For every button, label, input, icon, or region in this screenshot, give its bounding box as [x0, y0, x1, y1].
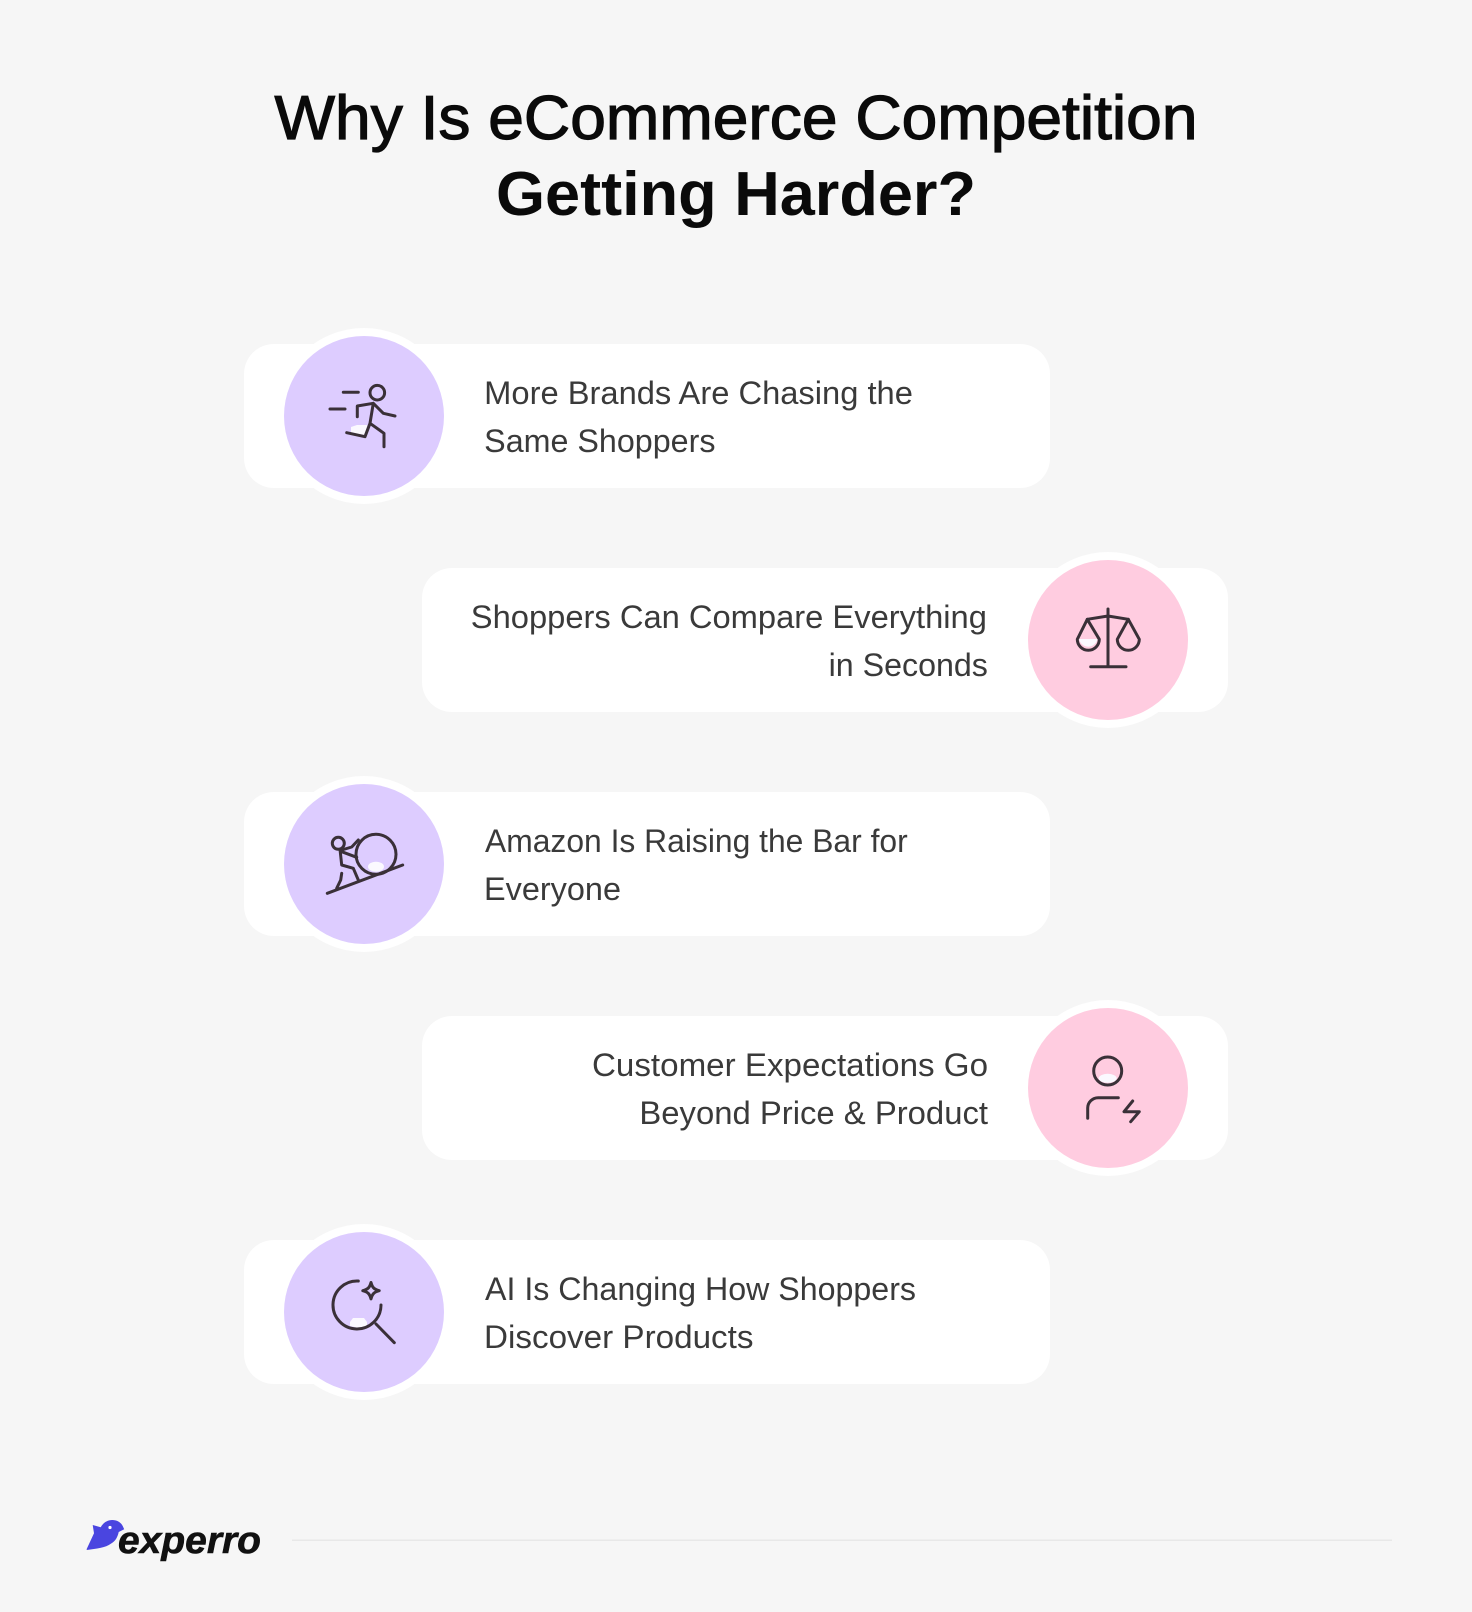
panel: more brands: Same Shoppers	[484, 423, 716, 459]
title: Getting Harder?	[496, 160, 976, 229]
panel: amazon: Amazon Is Raising the Bar for	[485, 823, 908, 859]
title	[274, 84, 1198, 229]
panel: compare	[422, 552, 1228, 728]
panel: more brands: More Brands Are Chasing the	[484, 375, 913, 411]
panel: compare: Shoppers Can Compare Everything	[471, 599, 987, 635]
icon: balance scale	[1077, 609, 1139, 667]
panel: ai: Discover Products	[484, 1319, 754, 1355]
icon: magnifier with sparkle	[333, 1281, 394, 1343]
title: Why Is eCommerce Competition	[274, 84, 1198, 153]
icon: person with lightning bolt	[1088, 1057, 1139, 1122]
icon: person pushing boulder	[327, 834, 403, 893]
panel: amazon: Everyone	[484, 871, 621, 907]
panel: expectations: Beyond Price & Product	[639, 1095, 988, 1131]
icon: bird	[87, 1520, 124, 1550]
panel: expectations: Customer Expectations Go	[592, 1047, 988, 1083]
panel: ai: AI Is Changing How Shoppers	[485, 1271, 916, 1307]
panel: expectations	[422, 1000, 1228, 1176]
panel: amazon	[244, 776, 1050, 952]
panel: compare: in Seconds	[829, 647, 988, 683]
logo: experro: experro	[118, 1520, 261, 1562]
panel: ai	[244, 1224, 1050, 1400]
icon: running person	[330, 385, 395, 447]
panel: more brands	[244, 328, 1050, 504]
